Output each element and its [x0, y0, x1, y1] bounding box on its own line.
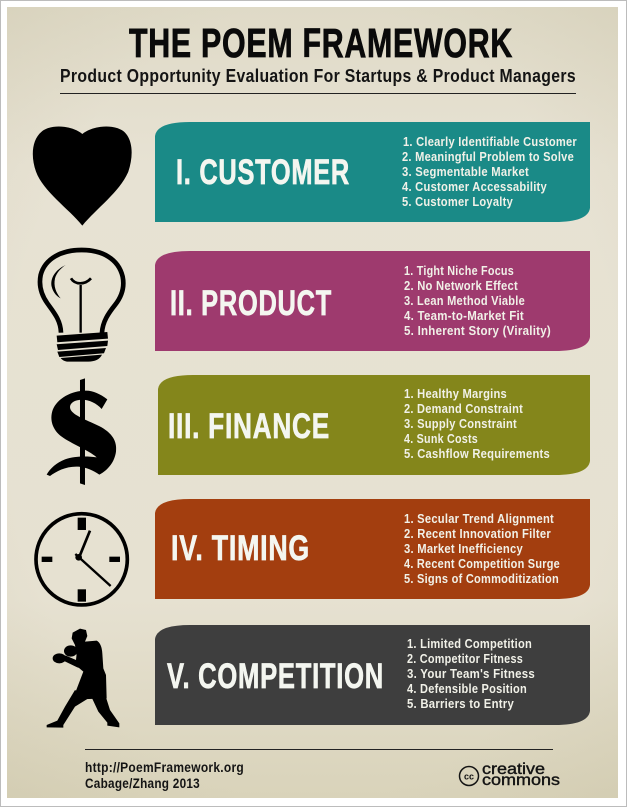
- panel: product: [155, 251, 590, 351]
- list: competition: 4. Defensible Position: [407, 681, 527, 696]
- list: customer: 1. Clearly Identifiable Customer: [403, 134, 577, 149]
- list: timing: [404, 511, 560, 586]
- list: timing: 1. Secular Trend Alignment: [404, 511, 554, 526]
- list: finance: 2. Demand Constraint: [404, 401, 523, 416]
- panel: competition: [155, 625, 590, 725]
- heading: customer: I. CUSTOMER: [176, 153, 350, 192]
- list: competition: 1. Limited Competition: [407, 636, 532, 651]
- heading: finance: III. FINANCE: [168, 407, 330, 446]
- list: customer: 4. Customer Accessability: [402, 179, 547, 194]
- list: customer: [402, 134, 577, 209]
- footer: url and credits: [85, 760, 244, 791]
- panel: customer: [155, 122, 590, 222]
- list: finance: 3. Supply Constraint: [404, 416, 517, 431]
- panel: timing: [155, 499, 590, 599]
- creative commons logo: cc: [464, 772, 474, 782]
- list: product: [404, 263, 551, 338]
- creative commons logo: creative: [482, 761, 545, 778]
- list: competition: [407, 636, 535, 711]
- list: customer: 5. Customer Loyalty: [402, 194, 513, 209]
- icon: dollar sign: [47, 378, 116, 485]
- heading: product: II. PRODUCT: [170, 284, 332, 323]
- heading: competition: V. COMPETITION: [167, 657, 384, 696]
- list: timing: 3. Market Inefficiency: [404, 541, 523, 556]
- icon: heart: [33, 127, 132, 226]
- list: timing: 2. Recent Innovation Filter: [404, 526, 551, 541]
- panel: finance: [158, 375, 590, 475]
- icon: light bulb: [40, 250, 123, 362]
- icon: boxer: [47, 629, 119, 728]
- list: finance: 5. Cashflow Requirements: [404, 446, 550, 461]
- icon: clock: [36, 514, 127, 605]
- list: product: 1. Tight Niche Focus: [404, 263, 514, 278]
- list: finance: 1. Healthy Margins: [404, 386, 507, 401]
- list: product: 3. Lean Method Viable: [404, 293, 525, 308]
- footer: url and credits: http://PoemFramework.org: [85, 760, 244, 775]
- list: finance: 4. Sunk Costs: [404, 431, 478, 446]
- list: product: 4. Team-to-Market Fit: [404, 308, 524, 323]
- list: customer: 3. Segmentable Market: [402, 164, 529, 179]
- list: competition: 3. Your Team's Fitness: [407, 666, 535, 681]
- footer: url and credits: Cabage/Zhang 2013: [85, 776, 200, 791]
- heading: timing: IV. TIMING: [171, 529, 310, 568]
- list: finance: [404, 386, 550, 461]
- list: competition: 5. Barriers to Entry: [407, 696, 514, 711]
- list: product: 5. Inherent Story (Virality): [404, 323, 551, 338]
- list: customer: 2. Meaningful Problem to Solve: [402, 149, 574, 164]
- list: product: 2. No Network Effect: [404, 278, 518, 293]
- list: timing: 4. Recent Competition Surge: [404, 556, 560, 571]
- list: competition: 2. Competitor Fitness: [407, 651, 523, 666]
- creative commons logo: commons: [482, 772, 560, 789]
- creative commons logo: [460, 761, 560, 789]
- list: timing: 5. Signs of Commoditization: [404, 571, 559, 586]
